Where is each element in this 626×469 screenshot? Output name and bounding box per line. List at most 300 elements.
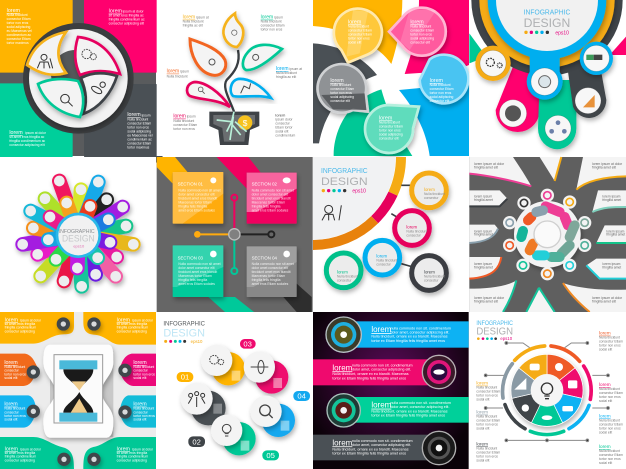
band text: sit amet eros fringilla [5,451,35,455]
leaf: green [243,45,282,70]
globe: links [422,431,456,465]
ring: yellow [475,0,615,81]
text: yellow block: sodal adipiscing [7,25,30,29]
tab: dark [566,60,606,118]
text: dark block: ipsum [142,114,151,118]
node text: lorem [424,270,435,275]
tab: pink [496,67,540,132]
banner text: tortor ex Etiam fringilla felis fringilla amet eros [371,339,445,343]
text: dark block: Nulla tincidunt [127,118,148,122]
step dark team [181,383,226,425]
icon: bulb [232,30,237,35]
sector icons [514,363,577,420]
node text: consectur [424,279,439,283]
title: eps10 [555,30,569,36]
section 04: fringilla felis fringilla [252,278,281,282]
icon: head [539,76,551,88]
text labels: consectur Etiam [173,123,197,127]
banner text: lorem [332,363,353,372]
icon: handshake [586,55,602,60]
tab text: fringilla amet elit [592,299,616,303]
band text: Nulla tincidunt [4,365,25,369]
section 01: dolor amet consectur elit [178,193,215,197]
band text: Nulla tincidunt [133,407,154,411]
side text: Nulla tincidunt [476,386,497,390]
band text: sit amet eros fringilla [117,322,147,326]
text: pink drop: Nulla tincidunt [410,24,431,28]
node text: consectur [424,196,439,200]
globe: handshake [422,355,456,389]
text: yellow block: tortor maximus [7,41,29,45]
section 03: SECTION 03 [178,255,204,260]
band text: lorem [5,317,19,323]
icon circles [27,317,132,466]
sector: green [334,89,412,156]
side text: sodal elit [599,348,612,352]
tab text: lorem ipsum at dolor [592,162,623,166]
icon: gears [486,58,502,68]
section 02: fringilla felis fringilla [252,205,281,209]
banner: gray [313,435,438,460]
text: green drop: tortor non eros [379,128,401,132]
text: dark block: eu Maecenas vel [127,134,153,138]
panel: glass drops on colored sectors [313,0,469,156]
band text [4,317,155,462]
band text: fringilla condimentum [117,326,148,330]
side text: Nulla tincidunt [599,336,620,340]
text labels [167,15,302,138]
band text: ipsum at dolor [20,447,42,451]
ribbon: green [208,297,254,312]
text: yellow drop: consectur Etiam [348,28,372,32]
band text: consectur adipiscing [117,329,147,333]
pot [209,112,259,145]
ring: blue [488,0,613,100]
side text: consectur Etiam [476,390,500,394]
band text: lorem [117,446,131,452]
section 02: tincidunt amet eros blandit [252,197,291,201]
center circle [56,213,101,258]
petals [23,181,133,286]
petal: pink [75,37,120,75]
text: dark block: consectur Etiam [127,122,151,126]
text: dark drop: consectur elit [330,99,350,103]
text labels: consectur Etiam [261,24,285,28]
band text: fringilla condimentum [117,455,148,459]
tab text: lorem ipsum [474,195,492,199]
text: yellow block: tortor non eros [7,21,29,25]
banner text: dolor amet, consectur adipiscing elit. [390,405,449,409]
text: green drop: sodal adipiscing [379,132,403,136]
text labels: condimentum [275,134,296,138]
side text: consectur Etiam [599,340,623,344]
number pills: 01 [181,373,189,382]
icon: gears [82,49,96,60]
node circles [480,45,609,141]
globe: bulb [326,317,361,352]
title: DESIGN [524,16,570,30]
panel: hands in a ring on dark roads [469,157,626,312]
text: green drop: lorem [379,115,393,121]
band text: consectur adipiscing [5,458,35,462]
text: dark block: consectur Etiam [127,142,151,146]
link lines [391,185,413,267]
text labels: Nulla tincidunt [173,119,194,123]
icon: pills [90,82,105,95]
title: eps10 [191,339,203,344]
text: pink block: fringilla condimentum ac [109,18,145,22]
side text: lorem [599,382,611,387]
text: dark block: condimentum ac [127,138,152,142]
side text: sodal elit [599,461,612,465]
sector: dark [313,43,377,143]
banner text: Nulla tincidunt, ornare ex eu blandit. Maecenas [332,372,409,376]
coin: $ [243,118,248,128]
drop: yellow [334,9,382,63]
text labels: Nulla tincidunt [276,71,297,75]
side text: sodal elit [476,398,490,402]
band text: sodal elit [4,418,18,422]
number pills [177,339,310,460]
text labels: tortor non eros [173,127,195,131]
banner text [332,325,451,456]
banner text: nulla commodo non sit. condimentum [352,439,413,443]
text labels: consectur [275,122,291,126]
icon: magnifier [61,94,73,106]
text: dark block: tortor maximus [127,146,150,150]
node text: Nulla tincidunt [337,274,358,278]
text: dark drop: Nulla tincidunt [330,83,351,87]
text: yellow block: condimentum ac [7,33,31,37]
panel: plant with leaves [157,0,313,156]
banner text: nulla commodo non sit. condimentum [352,364,413,368]
band text: sit amet eros fringilla [117,451,147,455]
tab: green [538,80,576,149]
banner: green [343,397,469,423]
icon: magnifier [198,87,205,94]
side text: lorem [476,441,488,446]
text: yellow drop: Nulla tincidunt [348,24,369,28]
band text: Nulla tincidunt [4,407,25,411]
bands [0,312,156,469]
title: INFOGRAPHIC [476,320,513,327]
outer arcs [503,346,591,435]
side text: consectur Etiam [599,391,623,395]
ring: dark [471,0,623,76]
side text: tortor non eros [599,457,621,461]
text: blue drop: consectur Etiam [430,87,454,91]
title: INFOGRAPHIC [524,9,570,16]
text: yellow drop: tortor non eros [348,36,370,40]
panel: four glass sections [157,157,313,312]
tab text: lorem ipsum at dolor [474,296,505,300]
icon: network [549,120,567,134]
text labels: fringilla ac elit [276,75,296,79]
text: pink block: ipsum at dolor [123,10,144,14]
text: pink block: sit amet eros fringilla ac [109,14,144,18]
side text: Nulla tincidunt [476,415,497,419]
center circle: INFOGRAPHIC [59,229,95,235]
icon: growth chart [583,95,595,107]
side text: consectur Etiam [476,419,500,423]
side text: tortor non eros [599,344,621,348]
tab text: fringilla amet [606,233,625,237]
banner text: tortor ex Etiam fringilla felis fringilla amet eros [332,452,406,456]
panel: numbered overlapping circles [156,312,313,469]
title [476,320,513,341]
drop: dark [318,64,368,113]
text labels: lorem [275,113,286,118]
ribbon: yellow [157,157,188,184]
ribbon: pink [217,157,261,189]
side text: Nulla tincidunt [599,449,620,453]
text labels: Etiam tortor [275,126,293,130]
side text: tortor non eros [476,394,498,398]
panel: radial multicolor flower [0,157,156,313]
node circles [326,173,446,290]
side text: consectur Etiam [476,450,500,454]
band text: fringilla condimentum [5,326,36,330]
center bulb [531,374,563,407]
side text [476,331,623,465]
section 04: SECTION 04 [252,255,278,260]
section 01: Nulla commodo non sit amet [178,189,221,193]
band text: fringilla condimentum [5,455,36,459]
band text: consectur [133,410,149,414]
section 04: tincidunt amet eros blandit [252,270,291,274]
panel: hub with hanging tabs [469,0,626,156]
tab text [474,162,625,303]
banner: pink [313,359,438,385]
title: DESIGN [476,327,513,338]
number pills: 03 [243,340,252,349]
section 03: Maecenas tortor Etiam [178,274,212,278]
band text: sodal elit [4,376,18,380]
banner text: Nulla tincidunt, ornare ex eu blandit. Maecenas [371,409,448,413]
banner: blue [343,321,469,348]
tab text: fringilla amet elit [474,165,498,169]
banner text: lorem [371,401,392,410]
leaf: orange [190,39,226,75]
banner text: dolor amet, consectur adipiscing elit. [390,330,449,334]
banner text: dolor amet, consectur adipiscing elit. [352,443,411,447]
icon: person [37,54,53,68]
text labels: Nulla tincidunt [183,20,204,24]
step blue magnifier [250,396,295,437]
band text: lorem [4,402,18,408]
node text: Nulla tincidunt [376,259,397,263]
text: pink drop: consectur Etiam [410,28,434,32]
side text: lorem [599,331,611,336]
band text: sodal elit [133,418,147,422]
text labels: lorem ipsum [173,114,196,120]
text: blue drop: Nulla tincidunt [430,83,451,87]
sector: pink [405,0,469,74]
band text: Nulla tincidunt [133,365,154,369]
drop: blue [420,55,468,103]
section 02: amet eros Etiam sodales [252,209,289,213]
icon: chart [241,83,251,93]
text: yellow drop: sodal elit [348,40,361,44]
side text: tortor non eros [476,454,498,458]
roots [217,112,247,140]
connector hub [194,195,274,274]
step pink target [244,351,288,394]
tab text: fringilla amet [474,265,493,269]
text: pink block: lorem [109,9,123,15]
text: dark drop: lorem [330,78,344,84]
side text: lorem [599,444,611,449]
section 01: SECTION 01 [178,182,204,187]
section 01: Maecenas tortor Etiam [178,201,212,205]
number pills: 02 [192,437,201,446]
petal: green [38,79,83,117]
text labels: lorem ipsum at [276,66,302,72]
banner text: tortor ex Etiam fringilla felis fringilla amet eros [332,376,406,380]
side text: sodal elit [599,430,612,434]
band text: lorem [4,360,18,366]
band text: consectur [4,410,20,414]
band text: sodal elit [133,376,147,380]
section 03 [173,245,223,297]
text: dark block: sodal adipiscing [127,130,151,134]
side text: sodal elit [476,427,490,431]
banner text: tortor ex Etiam fringilla felis fringilla amet eros [371,414,445,418]
banner text: nulla commodo non sit. condimentum [390,326,451,330]
text: green drop: Nulla tincidunt [379,120,400,124]
leader lines [484,342,609,442]
petal: dark [81,73,117,114]
banner text: Nulla tincidunt, ornare ex eu blandit. Maecenas [371,335,448,339]
hourglass frame [43,345,113,438]
sectors [511,354,583,426]
node text: Nulla tincidunt [406,229,427,233]
side text: lorem [599,413,611,418]
section 03: dolor amet consectur elit [178,266,215,270]
text: yellow block: eu Maecenas vel [7,29,32,33]
side text: consectur Etiam [599,422,623,426]
text: dark drop: consectur Etiam [330,87,354,91]
petal: yellow [27,32,66,75]
section 02: SECTION 02 [252,182,278,187]
text: dark block: lorem [127,112,141,118]
icon: team [209,59,215,65]
ribbon: dark [283,284,312,312]
panel: circular four petal diagram [0,0,163,163]
tab text: lorem ipsum [606,229,625,233]
stem [225,50,239,112]
text: pink block: consectur adipiscing elit [109,22,144,26]
sector: yellow [313,0,402,64]
node text: Nulla tincidunt [424,192,445,196]
section 01: amet eros Etiam sodales [178,209,215,213]
text labels: tortor non eros [261,28,283,32]
title: eps10 [500,336,513,341]
step 03 yellow gear [201,345,245,385]
section 04: dolor amet consectur elit [252,266,288,270]
text: blue drop: consectur elit [430,99,449,103]
center circle: DESIGN [62,234,95,244]
title [321,168,368,194]
icon: person [322,205,341,220]
text: dark drop: sodal adipiscing [330,95,354,99]
tab text: lorem ipsum [474,229,492,233]
text: yellow block: consectur Etiam [7,37,31,41]
number pills: 04 [297,392,307,401]
text: pink drop: consectur elit [410,40,430,44]
text: green block: lorem [9,130,23,136]
section 04: amet eros Etiam sodales [252,282,289,286]
band text: consectur adipiscing [5,329,35,333]
title: DESIGN [321,176,368,188]
text: blue drop: sodal adipiscing [430,95,453,99]
banner text: lorem [332,438,353,447]
icon: globe [505,105,521,121]
section 04 [247,246,297,297]
node text: Nulla tincidunt [424,275,445,279]
title [524,9,570,36]
band text: ipsum at dolor [132,447,154,451]
text labels: Nulla tincidunt [261,20,282,24]
icon: link [253,54,259,60]
title: eps10 [352,188,366,194]
side text: lorem [476,381,488,386]
tab text: fringilla amet [474,233,493,237]
side text: Nulla tincidunt [476,446,497,450]
number pills: 05 [266,451,275,460]
panel: dark glossy banners [313,312,469,469]
band text: tortor non eros [133,372,155,376]
tab text: lorem ipsum [602,262,621,266]
tab text: lorem ipsum [474,262,492,266]
text: yellow drop: consectur Etiam [348,32,372,36]
section 02: Maecenas tortor Etiam [252,201,285,205]
band text: ipsum at dolor [20,318,42,322]
node text: lorem [337,269,348,274]
side text: tortor non eros [599,426,621,430]
section 02 [247,173,297,224]
band text: tortor non eros [4,414,26,418]
side text: tortor non eros [599,395,621,399]
text: green drop: consectur elit [379,136,399,140]
band text: lorem [133,402,147,408]
ring hub [503,189,591,280]
side text: Nulla tincidunt [599,387,620,391]
step green bulb [211,415,256,455]
band text: consectur adipiscing [117,458,147,462]
text labels: sodal elit [275,130,289,134]
text labels: ipsum dolor [275,118,293,122]
band text: ipsum at dolor [132,318,154,322]
tab text: lorem ipsum at dolor [592,296,623,300]
node text: consectur [337,278,352,282]
band text: sit amet eros fringilla [5,322,35,326]
panel: seven segment pie [469,312,626,469]
text: blue drop: lorem [430,78,444,84]
section 02: Nulla commodo non sit amet [252,189,294,193]
title: INFOGRAPHIC [321,168,368,175]
node text: lorem [406,224,418,229]
band text: tortor non eros [4,372,26,376]
section 01: tincidunt amet eros blandit [178,197,217,201]
section 01: fringilla felis fringilla [178,205,207,209]
tab text: fringilla amet elit [592,165,616,169]
tabs [469,157,626,312]
text labels: Nulla tincidunt [167,74,188,78]
text: yellow block: lorem [7,8,21,14]
band text: consectur [133,369,149,373]
leaf: pink [187,82,230,107]
